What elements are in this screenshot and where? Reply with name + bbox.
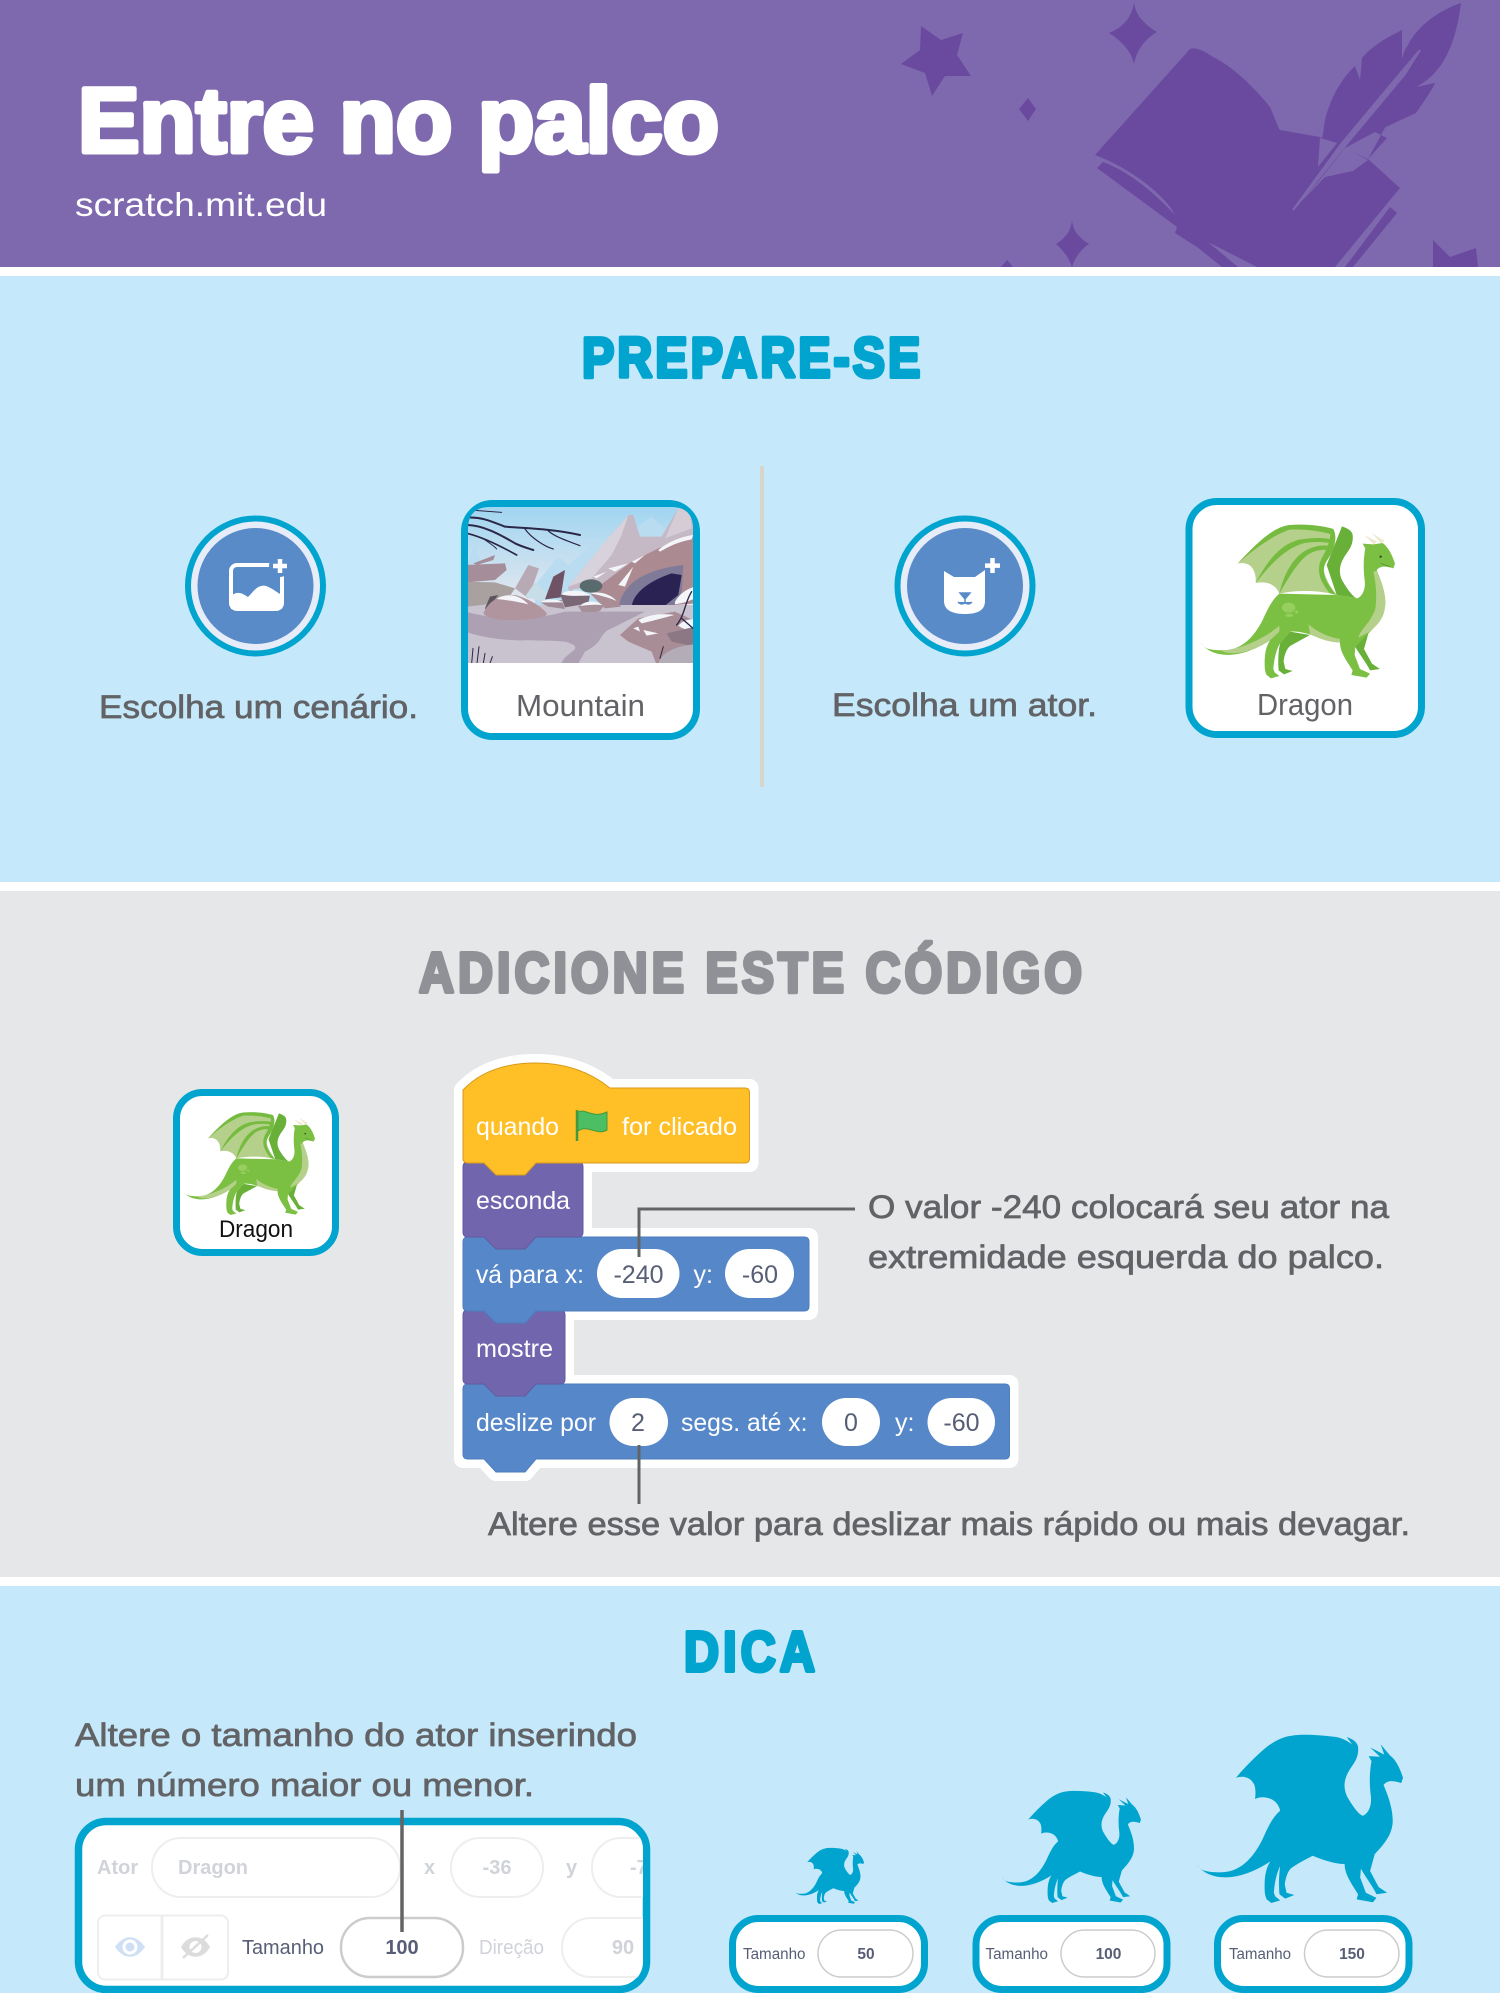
block: glide: segs. até x: [681,1409,808,1437]
heading: adicione este código: ADICIONE ESTE CÓDIGO [419,940,1082,1005]
block: glide: y: [895,1409,914,1437]
label: direção: Direção [479,1937,544,1959]
label: tamanho: Tamanho [242,1937,324,1959]
text: tip description [75,1717,637,1803]
size box: 100: 100 [1096,1946,1121,1963]
size box: 150: 150 [1339,1946,1365,1963]
size box: 50 [732,1918,924,1990]
callout: x value: extremidade esquerda do palco. [868,1239,1384,1275]
divider [760,466,764,787]
icon: green flag [577,1110,607,1141]
block: when flag clicked [463,1063,750,1175]
panel: sprite properties [78,1822,684,1990]
icon: small diamond [1019,98,1036,121]
block: hide [463,1162,583,1249]
panel: prepare-se [0,276,1500,882]
quill highlights [1293,50,1420,210]
label: dragon: Dragon [219,1216,293,1243]
toggle: visibility [98,1916,228,1980]
field: direction: 90 [612,1937,634,1959]
label: dragon: Dragon [1257,687,1353,722]
illustration: green dragon [1201,525,1395,678]
block: show [463,1310,565,1396]
icon: eye [115,1937,145,1957]
callout: x value: O valor -240 colocará seu ator na [868,1189,1389,1225]
title: Entre no palco [78,70,719,172]
field: x [424,1838,543,1897]
block: when flag clicked: for clicado [622,1113,737,1141]
icon: choose backdrop button [188,518,323,654]
heading: dica: DICA [684,1620,815,1684]
icon: hidden eye [181,1935,210,1958]
leader line: x value [639,1209,855,1257]
label: mountain: Mountain [516,688,645,723]
label: ator: Ator [97,1857,138,1879]
card: mountain backdrop [464,504,698,736]
field: direction [561,1917,643,1978]
icon: star [901,26,971,96]
icon: star bottom right [1433,240,1478,267]
card: dragon sprite small [176,1092,336,1252]
silhouette: medium dragon [1002,1791,1141,1903]
callout: x value [868,1189,1389,1275]
field: x: x [424,1857,435,1879]
code blocks [463,1063,1010,1472]
icon: sparkle bottom [1056,220,1089,267]
icon: sparkle top [1109,2,1157,64]
field: size [341,1918,463,1977]
panel: dica [0,1586,1500,1993]
field: y [566,1837,643,1898]
block: show: mostre [476,1335,553,1363]
subtitle url: scratch.mit.edu [75,186,327,223]
text: tip description: Altere o tamanho do ator inserindo [75,1717,637,1753]
block: glide: deslize por [476,1409,596,1437]
size box: 100 [976,1918,1167,1990]
field: x: -36 [483,1857,511,1879]
heading: prepare-se: PREPARE-SE [582,326,920,390]
leader line: size [400,1810,404,1932]
size box: 50: Tamanho [743,1946,806,1963]
block: when flag clicked: quando [476,1113,559,1141]
block: glide: -60 [943,1409,980,1437]
field: y: -7 [630,1857,648,1879]
illustration: snowy mountain scene [465,505,698,665]
field: name: Dragon [178,1857,248,1879]
panel: adicione este código [0,891,1500,1577]
block: glide [463,1384,1010,1472]
block: go to: vá para x: [476,1261,584,1289]
silhouette: small dragon [794,1848,864,1904]
block: go to: -60 [742,1261,778,1289]
block: go to: -240 [613,1261,664,1289]
text: choose backdrop: Escolha um cenário. [99,689,418,725]
block: go to: y: [694,1261,713,1289]
callout: glide seconds: Altere esse valor para deslizar mais rápido ou mais devagar. [488,1506,1410,1542]
text: choose sprite: Escolha um ator. [832,687,1097,723]
card: dragon sprite [1189,502,1422,734]
header banner [0,0,1500,267]
field: name [152,1838,400,1897]
text: tip description: um número maior ou menor. [75,1767,534,1803]
icon: choose sprite button [898,518,1032,654]
icon: star fragment [1001,260,1013,267]
size box: 150 [1218,1918,1409,1990]
block white outline [463,1063,1010,1472]
size box: 50: 50 [857,1946,875,1963]
icon: book and quill [1095,3,1461,267]
block: glide: 2 [631,1409,645,1437]
block: glide: 0 [844,1409,858,1437]
silhouette: large dragon [1197,1735,1403,1903]
illustration: small green dragon [183,1112,315,1215]
field: size: 100 [385,1937,419,1959]
field: y: y [566,1857,578,1879]
size box: 150: Tamanho [1229,1946,1291,1963]
block: go to [463,1237,809,1323]
block: hide: esconda [476,1187,570,1215]
leader line: glide seconds [638,1445,640,1504]
size box: 100: Tamanho [986,1946,1048,1963]
